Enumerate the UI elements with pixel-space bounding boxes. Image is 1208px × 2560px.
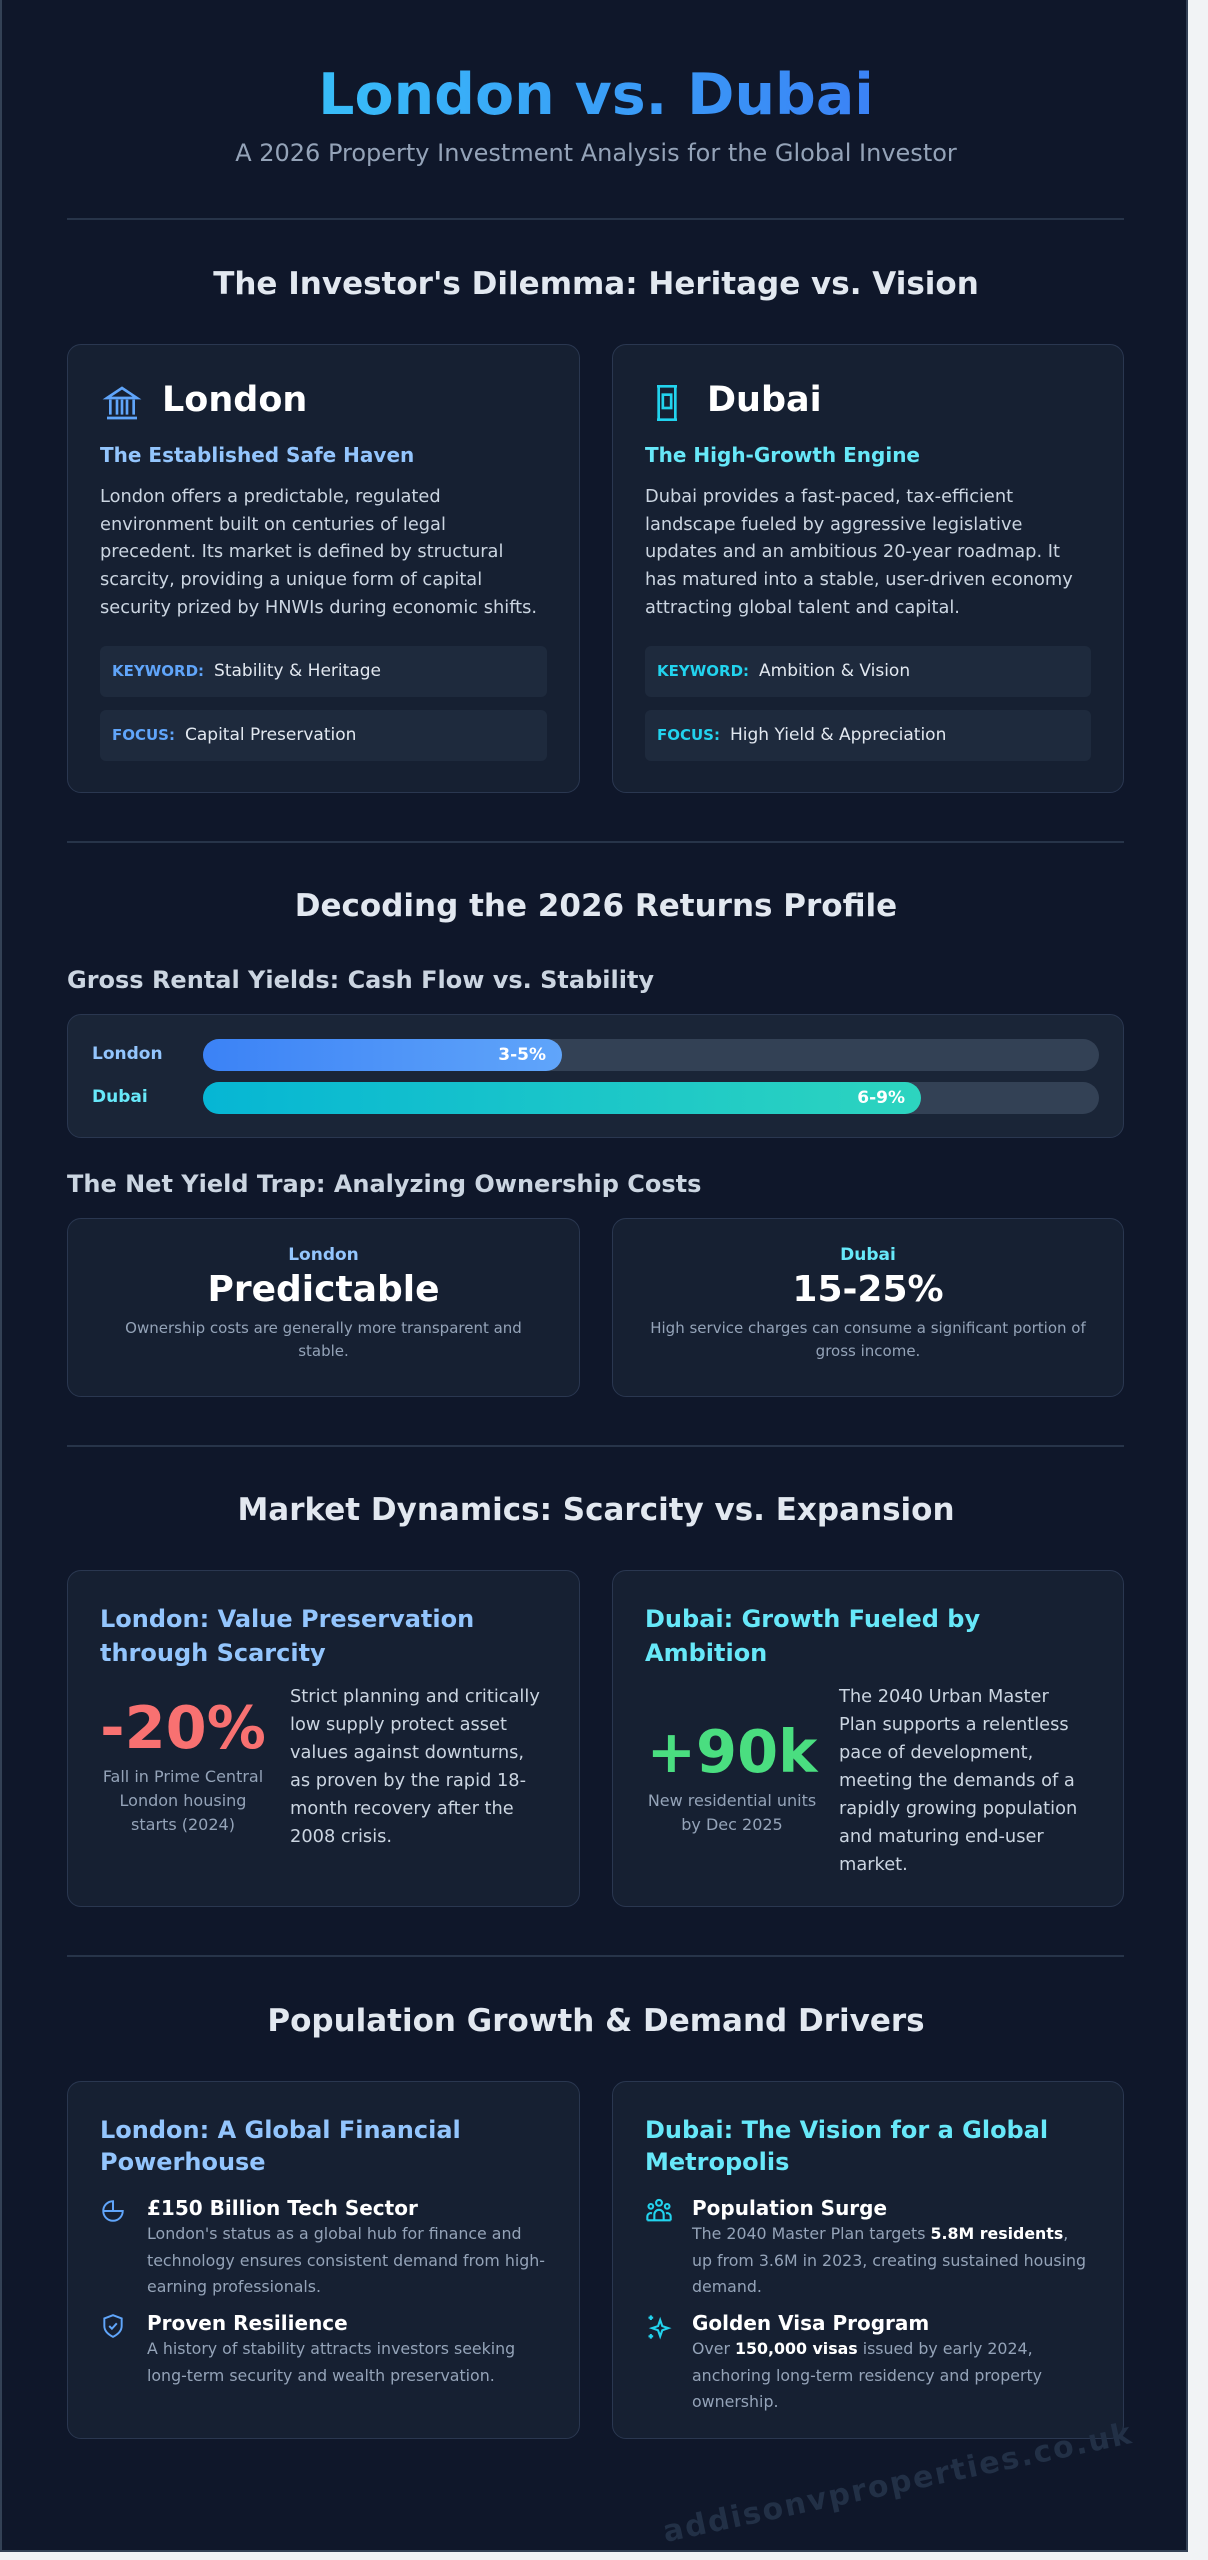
tagline: The High-Growth Engine [645, 443, 920, 467]
stat: New residential units by Dec 2025 [648, 1791, 816, 1834]
title: London vs. Dubai [318, 62, 874, 128]
stat: +90k [647, 1717, 817, 1786]
card heading: Dubai [707, 380, 822, 420]
bar: london: 3-5% [498, 1045, 546, 1065]
item: golden visa: Golden Visa Program [692, 2311, 929, 2335]
panel: dubai dilemma [612, 344, 1124, 793]
item: population: The 2040 Master Plan targets 5.8M residents, up from 3.6M in 2023, creating sustained housing demand. [692, 2224, 1086, 2296]
stat [647, 1717, 818, 1834]
text [100, 486, 537, 618]
panel: dubai net: Dubai [840, 1245, 896, 1265]
text: London offers a predictable, regulated [100, 486, 441, 507]
stat [100, 1693, 266, 1834]
focus [645, 710, 1091, 761]
bar: london: London [92, 1044, 163, 1064]
item: golden visa: Over 150,000 visas issued by early 2024, anchoring long-term residency and property ownership. [692, 2339, 1042, 2411]
card heading: London: A Global Financial Powerhouse [100, 2116, 461, 2176]
watermark: addisonvproperties.co.uk [660, 2416, 1136, 2550]
panel: london net: London [288, 1245, 359, 1265]
panel: london net: Ownership costs are generally more transparent and stable. [125, 1319, 522, 1360]
panel: london dilemma [67, 344, 580, 793]
icon: bank [102, 386, 142, 420]
subheading: net yield: The Net Yield Trap: Analyzing Ownership Costs [67, 1170, 701, 1198]
bar: dubai: 6-9% [857, 1088, 905, 1108]
heading: returns: Decoding the 2026 Returns Profile [295, 888, 897, 924]
text: has matured into a stable, user-driven economy [645, 569, 1073, 590]
heading: population: Population Growth & Demand Drivers [267, 2003, 925, 2039]
heading: market: Market Dynamics: Scarcity vs. Expansion [237, 1492, 955, 1528]
focus [100, 710, 547, 761]
text: updates and an ambitious 20-year roadmap. It [645, 541, 1060, 562]
bar: dubai: Dubai [92, 1087, 148, 1107]
icon: pie [102, 2200, 124, 2222]
subtitle: A 2026 Property Investment Analysis for the Global Investor [235, 139, 957, 167]
subheading: gross yields: Gross Rental Yields: Cash Flow vs. Stability [67, 966, 654, 994]
panel: london net [67, 1218, 580, 1397]
heading: dilemma: The Investor's Dilemma: Heritage vs. Vision [213, 266, 979, 302]
item: resilience: Proven Resilience [147, 2311, 348, 2335]
stat: -20% [100, 1693, 266, 1762]
keyword: KEYWORD: Ambition & Vision [657, 661, 910, 681]
panel: london market [67, 1570, 580, 1907]
item: tech: £150 Billion Tech Sector [147, 2196, 418, 2220]
panel: london population [67, 2081, 580, 2439]
bar chart [67, 1014, 1124, 1138]
icon: tower [657, 385, 677, 421]
text: environment built on centuries of legal [100, 514, 446, 535]
keyword [100, 646, 547, 697]
focus: FOCUS: Capital Preservation [112, 725, 356, 745]
tagline: The Established Safe Haven [100, 443, 414, 467]
panel: london net: Predictable [207, 1269, 440, 1310]
keyword [645, 646, 1091, 697]
item: resilience [103, 2311, 515, 2384]
item: tech [102, 2196, 545, 2296]
panel: dubai net: 15-25% [792, 1269, 944, 1310]
text: Strict planning and critically low supply protect asset values against downturns, as proven by the rapid 18-month recovery after the 2008 crisis. [290, 1686, 540, 1847]
icon: people [646, 2198, 672, 2222]
item: tech: London's status as a global hub for finance and technology ensures consistent demand from high-earning professionals. [147, 2224, 545, 2296]
text: security prized by HNWIs during economic shifts. [100, 597, 537, 618]
text: The 2040 Urban Master Plan supports a relentless pace of development, meeting the demands of a rapidly growing population and maturing end-user market. [839, 1686, 1077, 1875]
bar: dubai [92, 1082, 1099, 1114]
card heading: London [162, 380, 307, 420]
card heading: Dubai: Growth Fueled by Ambition [645, 1605, 980, 1667]
card heading: Dubai: The Vision for a Global Metropolis [645, 2116, 1048, 2176]
keyword: KEYWORD: Stability & Heritage [112, 661, 381, 681]
panel: dubai population [612, 2081, 1124, 2439]
icon: sparkles [648, 2315, 672, 2340]
item: resilience: A history of stability attracts investors seeking long-term security and wealth preservation. [147, 2339, 515, 2384]
item: golden visa [648, 2311, 1042, 2411]
card heading: London: Value Preservation through Scarcity [100, 1605, 474, 1667]
text: attracting global talent and capital. [645, 597, 960, 618]
text: scarcity, providing a unique form of capital [100, 569, 482, 590]
panel: dubai net [612, 1218, 1124, 1397]
item: population [646, 2196, 1086, 2296]
stat: Fall in Prime Central London housing starts (2024) [103, 1767, 263, 1834]
item: population: Population Surge [692, 2196, 887, 2220]
text: landscape fueled by aggressive legislative [645, 514, 1022, 535]
text [645, 486, 1073, 618]
text: Dubai provides a fast-paced, tax-efficient [645, 486, 1013, 507]
bar: london [92, 1039, 1099, 1071]
icon: shield [103, 2314, 123, 2338]
text: precedent. Its market is defined by structural [100, 541, 503, 562]
panel: dubai market [612, 1570, 1124, 1907]
focus: FOCUS: High Yield & Appreciation [657, 725, 946, 745]
panel: dubai net: High service charges can consume a significant portion of gross income. [650, 1319, 1086, 1360]
